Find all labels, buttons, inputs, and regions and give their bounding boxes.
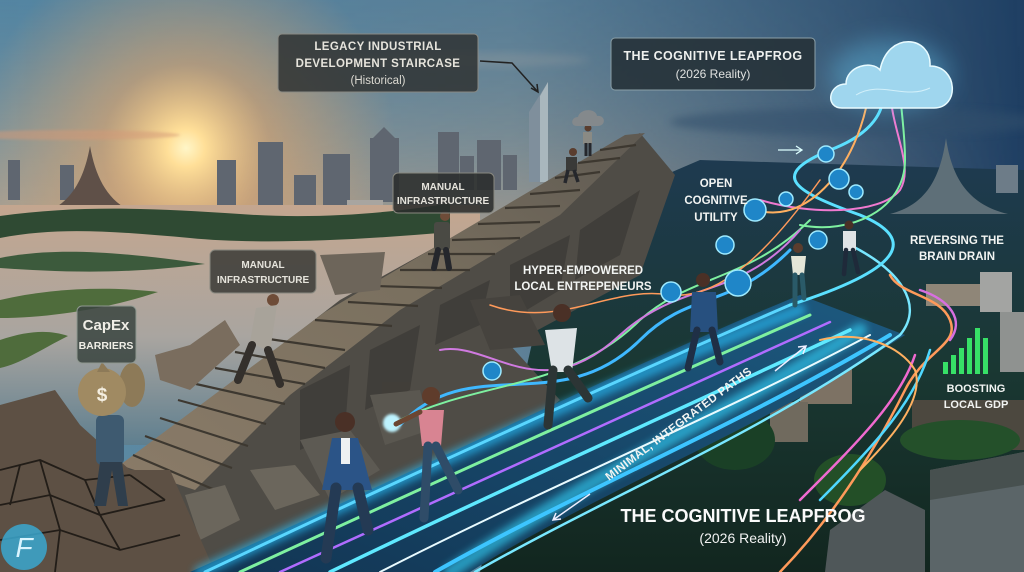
label: capex barriers: BARRIERS (79, 340, 133, 352)
people (78, 110, 858, 558)
arrow: path direction up (775, 346, 806, 371)
label: manual infrastructure upper (393, 173, 494, 213)
cloud icon (830, 40, 952, 110)
label: legacy staircase: (Historical) (351, 75, 406, 87)
label: legacy staircase: LEGACY INDUSTRIAL (314, 41, 442, 53)
label: capex barriers: CapEx (83, 317, 130, 334)
label: manual infrastructure lower (210, 250, 316, 293)
skyline: left city (8, 82, 548, 223)
glowing integrated paths (200, 85, 956, 572)
person: man carrying sacks (78, 362, 145, 506)
label: reversing the brain drain (910, 235, 1004, 263)
label: legacy staircase: DEVELOPMENT STAIRCASE (296, 58, 460, 70)
person: man far (843, 220, 858, 274)
path bed (190, 295, 905, 572)
label: open cognitive utility: UTILITY (694, 212, 738, 224)
bar chart icon: boosting GDP (943, 328, 988, 374)
label: capex barriers (77, 306, 136, 363)
person: man carrying sacks: $ (97, 385, 108, 406)
person: stair climber lower (238, 294, 280, 384)
person: top climbers (565, 110, 604, 183)
label: manual infrastructure upper: MANUAL (421, 182, 465, 193)
arrow: legacy to staircase (480, 61, 538, 92)
label: the cognitive leapfrog top: (2026 Reality) (676, 67, 750, 81)
label: legacy staircase (278, 34, 478, 92)
label: hyper-empowered: LOCAL ENTREPENEURS (514, 281, 652, 293)
person: man in white shirt (545, 304, 588, 425)
arrow: path direction down (553, 494, 590, 520)
person: man in blue jacket (688, 273, 720, 368)
label: boosting local gdp: BOOSTING (947, 383, 1005, 395)
logo badge: F (15, 532, 34, 563)
label: open cognitive utility: COGNITIVE (684, 195, 748, 207)
logo badge (1, 524, 47, 570)
label: hyper-empowered: HYPER-EMPOWERED (523, 265, 643, 277)
label: the cognitive leapfrog bottom: THE COGNITIVE LEAPFROG (620, 506, 866, 526)
label: manual infrastructure upper: INFRASTRUCTURE (397, 196, 489, 207)
label: minimal integrated paths: MINIMAL, INTEGRATED PATHS (604, 366, 755, 483)
cracked ground (0, 390, 215, 572)
label: open cognitive utility: OPEN (700, 178, 732, 190)
right side: city and greenery below the paths (480, 138, 1024, 572)
label: the cognitive leapfrog bottom (620, 506, 866, 546)
label: boosting local gdp: LOCAL GDP (944, 399, 1008, 411)
label: the cognitive leapfrog bottom: (2026 Reality) (699, 530, 787, 546)
label: boosting local gdp (944, 383, 1008, 411)
river and green banks (0, 203, 480, 445)
label: manual infrastructure lower: INFRASTRUCTURE (217, 275, 309, 286)
staircase: legacy development (120, 133, 675, 572)
arrow: path direction upper (778, 146, 802, 154)
icons: glowing nodes on the paths (483, 146, 863, 380)
label: reversing the brain drain: REVERSING THE (910, 235, 1004, 247)
label: manual infrastructure lower: MANUAL (241, 260, 285, 271)
label: reversing the brain drain: BRAIN DRAIN (919, 251, 995, 263)
person: woman walking far (791, 243, 806, 305)
person: stair climber middle (434, 211, 450, 268)
person: man in blue suit (322, 412, 372, 558)
label: hyper-empowered (514, 265, 652, 293)
label: the cognitive leapfrog top (611, 38, 815, 90)
label: the cognitive leapfrog top: THE COGNITIVE LEAPFROG (624, 49, 802, 63)
label: open cognitive utility (684, 178, 748, 224)
person: woman in pink (396, 387, 458, 518)
